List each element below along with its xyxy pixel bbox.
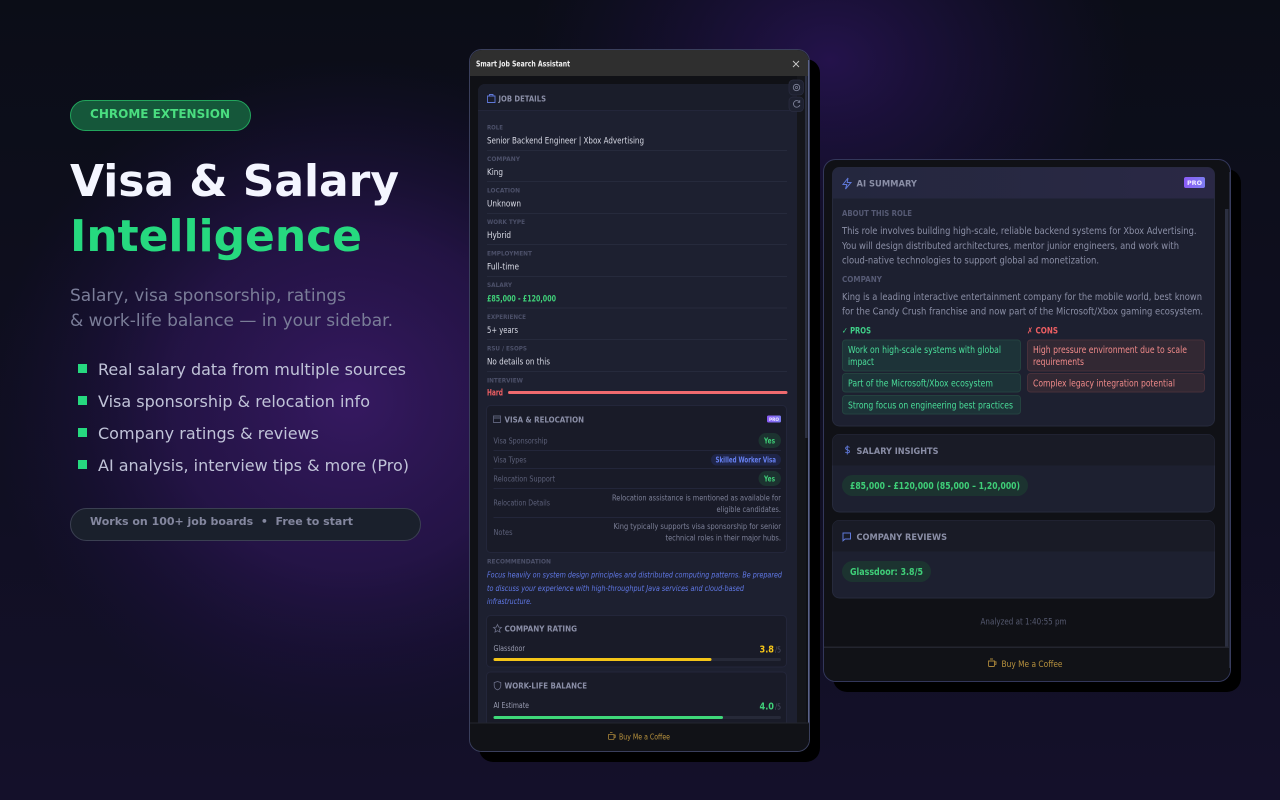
about this role: You will design distributed architectures, mentor junior engineers, and work with — [841, 241, 1179, 252]
field rows: No details on this — [487, 358, 550, 368]
badge: chrome extension — [70, 100, 250, 130]
field rows: 5+ years — [487, 326, 518, 336]
footnote pill: Works on 100+ job boards • Free to start — [90, 515, 353, 528]
pros list: impact — [848, 357, 874, 368]
card: job details: JOB DETAILS — [498, 94, 546, 104]
subtitle — [70, 286, 393, 331]
card: company rating: Glassdoor — [494, 644, 526, 653]
field rows: Hybrid — [487, 231, 511, 241]
card: visa and relocation: technical roles in their major hubs. — [666, 534, 781, 542]
feature list: AI analysis, interview tips & more (Pro) — [98, 456, 409, 475]
recommendation: infrastructure. — [487, 597, 532, 606]
card: work-life balance: AI Estimate — [494, 701, 529, 710]
field rows: EMPLOYMENT — [487, 250, 532, 258]
feature list: Visa sponsorship & relocation info — [98, 392, 370, 411]
window title bar — [470, 50, 809, 76]
recommendation: Focus heavily on system design principles and distributed computing patterns. Be prepared — [487, 570, 783, 580]
card: visa and relocation: Notes — [494, 528, 512, 537]
card: visa and relocation: Yes — [763, 474, 775, 484]
field rows: EXPERIENCE — [487, 313, 526, 321]
field rows: LOCATION — [487, 186, 520, 194]
title — [70, 156, 399, 262]
recommendation: to discuss your experience with high-throughput Java services and cloud-based — [487, 584, 745, 593]
card: company reviews: COMPANY REVIEWS — [856, 533, 947, 543]
card: AI summary: AI SUMMARY — [856, 180, 917, 190]
window footer: buy me a coffee: Buy Me a Coffee — [1002, 660, 1062, 670]
card: visa and relocation: Relocation assistance is mentioned as available for — [612, 494, 782, 502]
card: visa and relocation: Yes — [763, 436, 775, 446]
footnote pill — [70, 508, 420, 540]
scrollbar — [797, 76, 806, 723]
company description: for the Candy Crush franchise and now part of the Microsoft/Xbox gaming ecosystem. — [842, 306, 1203, 318]
company description: COMPANY — [842, 275, 882, 284]
field rows: Senior Backend Engineer | Xbox Advertising — [487, 136, 644, 146]
card: work-life balance: 4.0 — [760, 702, 774, 712]
card: salary insights: SALARY INSIGHTS — [856, 447, 938, 457]
cons list: High pressure environment due to scale — [1033, 345, 1187, 356]
card: work-life balance: /5 — [775, 702, 781, 712]
analyzed timestamp: Analyzed at 1:40:55 pm — [980, 618, 1066, 628]
card: visa and relocation: Skilled Worker Visa — [716, 456, 776, 465]
recommendation: RECOMMENDATION — [487, 558, 551, 566]
card: salary insights: £85,000 - £120,000 (85,000 – 1,20,000) — [850, 481, 1020, 492]
badge: pro: PRO — [769, 417, 779, 423]
field rows: ROLE — [487, 124, 503, 132]
panel: left hero column — [70, 100, 420, 540]
recommendation — [487, 558, 783, 606]
panel: AI summary sidebar window — [824, 160, 1241, 692]
panel: job details sidebar window — [470, 50, 820, 762]
card: company reviews — [832, 520, 1214, 598]
card: visa and relocation: Relocation Details — [494, 498, 550, 508]
badge: pro — [1184, 177, 1205, 188]
feature list — [78, 360, 409, 475]
field rows: Unknown — [487, 200, 521, 210]
card: company reviews: Glassdoor: 3.8/5 — [850, 567, 923, 578]
card: visa and relocation: eligible candidates. — [716, 505, 781, 514]
about this role: cloud-native technologies to support global ad monetization. — [842, 256, 1099, 266]
card: salary insights — [832, 434, 1214, 512]
card: visa and relocation: Visa Sponsorship — [494, 436, 548, 446]
window footer: buy me a coffee: Buy Me a Coffee — [619, 732, 670, 742]
field rows: SALARY — [487, 281, 512, 289]
scrollbar — [1225, 209, 1228, 647]
pros list: Part of the Microsoft/Xbox ecosystem — [848, 378, 993, 390]
field rows — [487, 124, 644, 398]
card: company rating: /5 — [775, 646, 781, 654]
card: work-life balance: WORK-LIFE BALANCE — [504, 682, 587, 690]
icon: bolt — [843, 178, 851, 189]
card: visa and relocation: Relocation Support — [494, 474, 555, 484]
about this role: This role involves building high-scale, reliable backend systems for Xbox Advertising. — [841, 226, 1196, 237]
badge: chrome extension: CHROME EXTENSION — [90, 107, 230, 121]
company description — [842, 275, 1203, 318]
subtitle: & work-life balance — in your sidebar. — [70, 311, 393, 331]
about this role: ABOUT THIS ROLE — [842, 209, 912, 218]
pros list — [842, 326, 1020, 414]
interview difficulty bar — [508, 391, 788, 394]
card: company rating: COMPANY RATING — [504, 624, 577, 634]
cons list: requirements — [1033, 357, 1084, 368]
field rows: Full-time — [487, 262, 519, 272]
card: company rating: 3.8 — [760, 644, 774, 656]
about this role — [841, 209, 1196, 266]
cons list: ✗ CONS — [1027, 326, 1058, 336]
cons list: Complex legacy integration potential — [1033, 378, 1175, 390]
pros list: ✓ PROS — [842, 326, 871, 336]
field rows: INTERVIEW — [487, 376, 523, 384]
field rows: King — [487, 168, 503, 178]
card: visa and relocation: Visa Types — [494, 456, 526, 464]
field rows: Hard — [487, 388, 503, 398]
window footer: buy me a coffee — [470, 722, 809, 751]
floating buttons: settings and refresh — [789, 80, 804, 112]
feature list: Company ratings & reviews — [98, 424, 319, 443]
window title bar: Smart Job Search Assistant — [476, 60, 570, 68]
field rows: £85,000 - £120,000 — [487, 294, 556, 304]
pros list: Strong focus on engineering best practices — [848, 400, 1013, 411]
pros list: Work on high-scale systems with global — [848, 345, 1001, 356]
title: Visa & Salary — [70, 156, 399, 207]
card: AI summary — [832, 168, 1214, 426]
title: Intelligence — [70, 211, 362, 262]
field rows: COMPANY — [487, 155, 520, 163]
field rows: WORK TYPE — [487, 218, 525, 226]
field rows: RSU / ESOPS — [487, 344, 527, 352]
card: work-life balance — [486, 672, 786, 723]
card: visa and relocation: King typically supports visa sponsorship for senior — [614, 522, 782, 531]
card: visa and relocation — [486, 406, 786, 552]
card: job details — [478, 84, 797, 723]
card: company rating — [486, 616, 786, 667]
cons list — [1027, 326, 1204, 392]
card: visa and relocation: VISA & RELOCATION — [504, 416, 584, 424]
feature list: Real salary data from multiple sources — [98, 360, 406, 379]
icon: briefcase — [488, 94, 495, 102]
company description: King is a leading interactive entertainment company for the mobile world, best known — [842, 292, 1202, 303]
badge: pro: PRO — [1187, 179, 1202, 187]
subtitle: Salary, visa sponsorship, ratings — [70, 286, 346, 306]
window footer: buy me a coffee — [824, 646, 1230, 681]
badge: pro — [767, 416, 781, 423]
